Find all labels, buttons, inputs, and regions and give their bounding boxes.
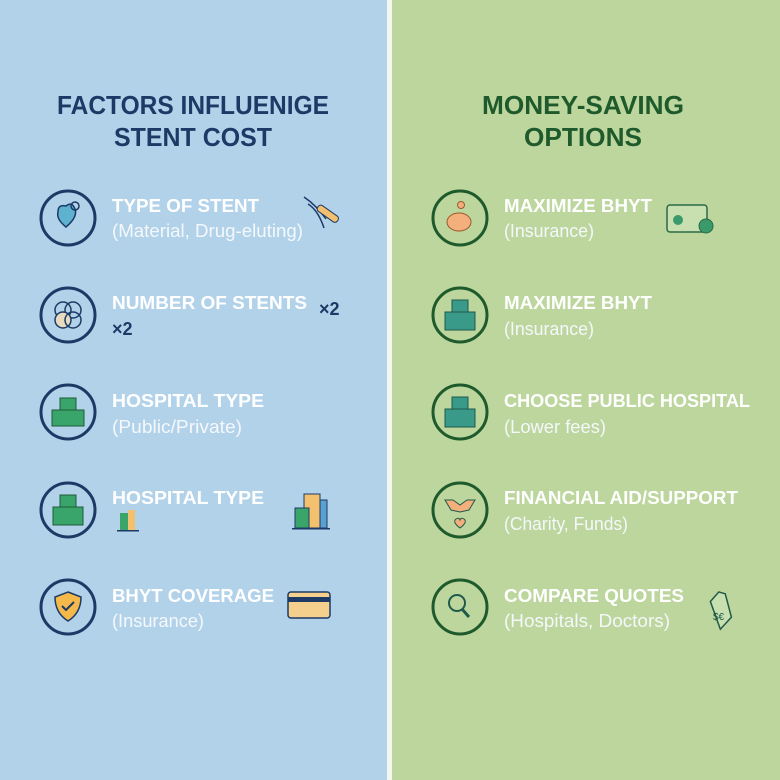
icon: hospital teal: [433, 288, 487, 342]
item: maximize bhyt 2: (Insurance): [504, 319, 594, 339]
item: bhyt coverage: (Insurance): [112, 611, 204, 631]
item: maximize bhyt 2: MAXIMIZE BHYT: [504, 292, 653, 313]
item: maximize bhyt 1: MAXIMIZE BHYT: [504, 195, 653, 216]
icon: card: [288, 592, 330, 618]
icon: hospital: [41, 385, 95, 439]
item: maximize bhyt 1: (Insurance): [504, 221, 594, 241]
title: right: [482, 90, 684, 152]
icon: shield: [41, 580, 95, 634]
title: left: STENT COST: [114, 122, 272, 152]
icon: heart gear: [41, 191, 95, 245]
icon: piggy bank: [433, 191, 487, 245]
item: maximize bhyt 2: [433, 288, 653, 342]
item: hospital type 1: (Public/Private): [112, 417, 242, 437]
item: maximize bhyt 1: [433, 191, 713, 245]
item: number of stents: [41, 288, 340, 342]
item: choose public hospital: [433, 385, 750, 439]
title: left: FACTORS INFLUENIGE: [57, 90, 329, 120]
icon: magnifier: [433, 580, 487, 634]
title: left: [57, 90, 329, 152]
item: hospital type 2: HOSPITAL TYPE: [112, 487, 264, 508]
icon: catheter: [304, 197, 340, 228]
item: type of stent: TYPE OF STENT: [112, 195, 260, 216]
icon: buildings: [292, 494, 330, 530]
title: right: MONEY-SAVING: [482, 90, 684, 120]
icon: small building: [117, 510, 139, 532]
item: compare quotes: COMPARE QUOTES: [504, 585, 684, 606]
item: financial aid: (Charity, Funds): [504, 514, 628, 534]
item: compare quotes: (Hospitals, Doctors): [504, 611, 670, 631]
item: bhyt coverage: BHYT COVERAGE: [112, 585, 274, 606]
item: number of stents: ×2: [112, 319, 133, 339]
item: choose public hospital: (Lower fees): [504, 417, 606, 437]
panel: left background: [0, 0, 387, 780]
icon: price tag: $€: [713, 612, 725, 623]
item: bhyt coverage: [41, 580, 330, 634]
icon: handshake heart: [433, 483, 487, 537]
panel: right background: [392, 0, 780, 780]
item: type of stent: (Material, Drug-eluting): [112, 221, 303, 241]
icon: price tag: [709, 591, 733, 630]
icon: circles: [41, 288, 95, 342]
item: hospital type 1: [41, 385, 264, 439]
icon: id card: [667, 205, 713, 233]
item: choose public hospital: CHOOSE PUBLIC HOSPITAL: [504, 390, 750, 411]
item: financial aid: [433, 483, 739, 537]
item: compare quotes: [433, 580, 733, 634]
icon: hospital teal: [433, 385, 487, 439]
title: right: OPTIONS: [524, 122, 642, 152]
item: number of stents: ×2: [319, 299, 340, 319]
item: type of stent: [41, 191, 340, 245]
item: number of stents: NUMBER OF STENTS: [112, 292, 307, 313]
icon: hospital green: [41, 483, 95, 537]
item: hospital type 2: [41, 483, 330, 537]
item: financial aid: FINANCIAL AID/SUPPORT: [504, 487, 739, 508]
item: hospital type 1: HOSPITAL TYPE: [112, 390, 264, 411]
